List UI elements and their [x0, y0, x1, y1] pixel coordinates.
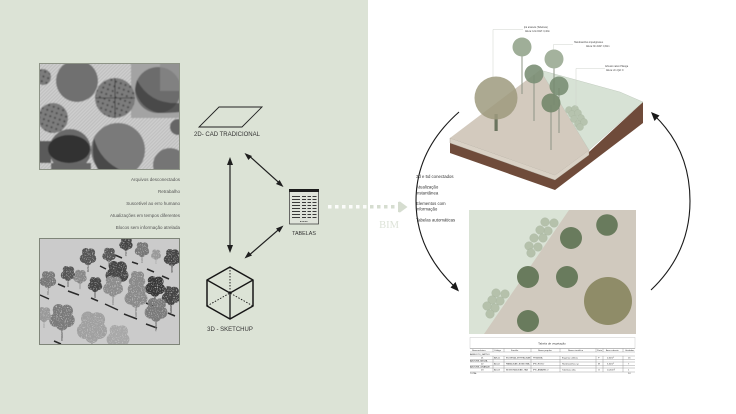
arrow: left cycle arc [416, 112, 459, 292]
table: vegetation schedule: Unidades [625, 350, 635, 352]
table: vegetation schedule: 14,50m² [607, 368, 615, 372]
table: vegetation schedule: Nome científico [568, 349, 584, 352]
arrow: 2D to 3D [227, 157, 233, 253]
table: vegetation schedule: Área coberta [606, 349, 619, 352]
table: vegetation schedule: IPE_ROXO [533, 364, 544, 366]
table: vegetation schedule: ARVORE_GRANDE [470, 366, 490, 368]
plan tan ground [469, 210, 636, 334]
arrow: right cycle arc [651, 112, 690, 290]
trees [512, 38, 568, 150]
table: vegetation schedule: G [598, 370, 600, 372]
list: BIM benefits: 3d e 5d conectados [416, 174, 454, 179]
list: BIM benefits: Elementos com [416, 201, 446, 206]
plan large tree [584, 277, 632, 325]
image: 2D CAD hatched plan [39, 63, 180, 170]
list: BIM benefits [416, 174, 455, 222]
chart: isometric terrain model [450, 26, 643, 190]
list: BIM benefits: instantânea [416, 190, 439, 196]
table: vegetation schedule: 0,50m² [607, 356, 614, 360]
tree annotations: Altura: 8m DAP: 0,30m [586, 45, 610, 48]
list: BIM benefits: informação [416, 206, 438, 212]
table: vegetation schedule: TOTAL [470, 372, 478, 375]
label: 3D SketchUp: 3D - SKETCHUP [207, 327, 253, 333]
list: problems of the traditional workflow: Retrabalho [158, 189, 180, 194]
table: vegetation schedule: M [598, 364, 600, 366]
list: BIM benefits: Tabelas automáticas [416, 218, 455, 222]
chart: site plan [469, 210, 636, 334]
arrow: 2D to tables [244, 153, 284, 187]
arrow: dotted transition to BIM [328, 202, 408, 212]
terrain side strip [450, 138, 589, 180]
table: vegetation schedule [470, 338, 635, 375]
arrow: 3D to tables [244, 226, 284, 258]
table: vegetation schedule: 03 [481, 370, 484, 372]
label: 2D CAD: 2D- CAD TRADICIONAL [194, 132, 261, 138]
table: vegetation schedule: AV-03 [494, 368, 501, 372]
terrain soil [450, 102, 643, 190]
plan shrubs [483, 218, 558, 318]
list: problems of the traditional workflow: Atualizações em tempos diferentes [110, 213, 181, 218]
list: problems of the traditional workflow: Blocos sem informação atrelada [116, 225, 180, 230]
tree annotations: Altura: 12m DAP: 0,40m [525, 30, 550, 33]
table: vegetation schedule: IPE_AMARELO [533, 368, 549, 372]
icon: wireframe cube [207, 267, 253, 319]
tree annotations: Ipê amarelo (Tabebuia) [524, 26, 548, 29]
plan trees [517, 214, 618, 332]
leader lines [493, 30, 605, 107]
terrain green surface [540, 70, 643, 150]
table: vegetation schedule: Tabela de vegetação [538, 342, 566, 346]
table: vegetation schedule: 16 [628, 358, 631, 360]
list: BIM benefits: Atualização [416, 184, 439, 190]
list: problems of the traditional workflow: Suscetível ao erro humano [126, 201, 180, 206]
table: vegetation schedule: Tabebuia alba [562, 370, 576, 372]
table: vegetation schedule: 3,50m² [607, 362, 614, 366]
shrubs [566, 106, 588, 130]
table: vegetation schedule: Handroanthus sp [562, 362, 579, 366]
label: BIM: BIM [379, 220, 400, 231]
tree annotations: Altura: 2m Qtd: 9 [606, 69, 624, 72]
label: tables: TABELAS [292, 231, 316, 237]
large tree [474, 76, 518, 131]
table: vegetation schedule: ARVORE_MEDIA [470, 360, 488, 362]
table: vegetation schedule: ARBUSTO_NATIVO [470, 353, 490, 356]
image: 3D SketchUp tree model [39, 238, 180, 345]
tree annotations: Handroanthus impetiginosus [574, 41, 604, 44]
list: problems of the traditional workflow [110, 177, 181, 230]
table: vegetation schedule: Família [511, 350, 519, 352]
table: vegetation schedule: 7 [628, 364, 630, 366]
table: vegetation schedule: 1 [628, 370, 630, 372]
table: vegetation schedule: Porte [597, 349, 603, 352]
table: vegetation schedule: P [598, 358, 600, 360]
table: vegetation schedule: Nome popular [538, 349, 552, 352]
icon: 2D plane [199, 107, 262, 127]
table: vegetation schedule: Código [494, 350, 502, 352]
table: vegetation schedule: BIGNONIACEAE_TAB [506, 368, 529, 372]
plan green area [469, 210, 569, 334]
table: vegetation schedule: FABACEAE_BIGNONIA [506, 362, 530, 366]
table: vegetation schedule: Nomenclatura [472, 349, 486, 352]
table: vegetation schedule: 02 [481, 364, 484, 366]
list: problems of the traditional workflow: Arquivos desconectados [131, 177, 181, 182]
table: vegetation schedule: 01 [481, 358, 484, 360]
tree annotations [524, 26, 629, 72]
table: vegetation schedule: EUGENIA_MYRTACEAE [506, 356, 531, 360]
panel: traditional workflow background [0, 0, 368, 414]
table: vegetation schedule: AV-02 [494, 362, 501, 366]
tree annotations: Arbusto nativo Pitanga [605, 65, 629, 68]
table: vegetation schedule: AR-01 [494, 356, 501, 360]
terrain tan surface [450, 70, 589, 175]
table: vegetation schedule: PITANGA [533, 356, 543, 360]
table: vegetation schedule: Eugenia uniflora [562, 356, 579, 360]
icon: table [289, 189, 319, 224]
table: vegetation schedule: 24 [628, 373, 631, 375]
